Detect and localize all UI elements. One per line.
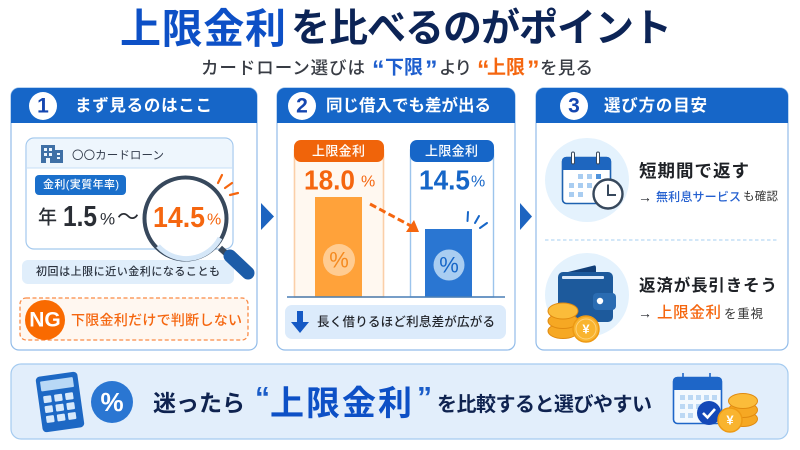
icon: wallet and coins — [545, 253, 629, 342]
title — [120, 6, 672, 52]
column: 14.5% — [410, 140, 494, 297]
arrow: step 2 to 3 — [520, 203, 532, 230]
column: 18.0% — [294, 140, 384, 297]
panel 3 header: 選び方の目安 — [604, 95, 707, 115]
text: short term: 短期間で返す — [639, 161, 749, 181]
banner text: を比較すると選びやすい — [437, 393, 652, 416]
column: 18.0%: 18.0 — [304, 164, 355, 196]
NG box — [20, 298, 248, 340]
icon: calculator — [35, 371, 85, 433]
badge — [35, 175, 126, 195]
subtitle — [201, 56, 593, 84]
subtitle: カードローン選びは — [201, 58, 365, 78]
column: 14.5%: % — [439, 252, 459, 278]
subtitle: ” — [527, 56, 540, 84]
icon: calendar with check and coins — [673, 373, 758, 432]
badge: 金利(実質年率) — [43, 177, 119, 191]
rate text: 年 — [38, 206, 57, 228]
arrow: dashed decrease — [370, 204, 419, 232]
subtitle: “ — [477, 56, 490, 84]
banner text — [153, 382, 652, 423]
column: 18.0%: 上限金利 — [312, 144, 365, 158]
banner text: 迷ったら — [153, 390, 245, 416]
panel: step 1 — [11, 88, 257, 350]
icon: building — [41, 145, 63, 163]
note: interest gap — [285, 305, 506, 339]
column: 18.0%: % — [329, 248, 349, 272]
banner text: “ — [255, 382, 270, 414]
subtitle: より — [439, 58, 472, 78]
column: 14.5%: % — [471, 174, 485, 190]
panel 3 header — [536, 88, 788, 123]
panel 1 header — [11, 88, 257, 123]
panel 3 header: 3 — [568, 94, 580, 118]
icon: calendar with check and coins: ¥ — [726, 412, 734, 428]
icon: magnifier: 14.5 — [153, 202, 205, 234]
text: long repayment — [638, 275, 777, 322]
text: short term — [638, 161, 778, 205]
banner: conclusion — [11, 364, 788, 439]
note bar — [22, 260, 234, 284]
text: long repayment: 上限金利 — [657, 304, 721, 322]
panel: step 3 — [536, 88, 788, 350]
note bar: 初回は上限に近い金利になることも — [36, 264, 220, 278]
title: を比べるのがポイント — [291, 8, 672, 50]
subtitle: 上限 — [487, 56, 525, 78]
subtitle: “ — [372, 56, 384, 84]
icon: percent — [91, 381, 133, 423]
panel 2 header: 2 — [296, 94, 308, 118]
column: 14.5%: 14.5 — [419, 164, 470, 196]
note: interest gap: 長く借りるほど利息差が広がる — [317, 314, 495, 329]
text: short term: → — [638, 189, 652, 205]
text: long repayment: → — [638, 305, 652, 321]
subtitle: 下限 — [385, 56, 423, 78]
NG box: NG — [29, 308, 61, 332]
arrow: step 1 to 2 — [261, 203, 274, 230]
subtitle: を見る — [540, 58, 593, 78]
panel 1 header: 1 — [37, 94, 49, 118]
text: long repayment: を重視 — [724, 306, 763, 321]
icon: calendar and clock — [545, 138, 629, 222]
rate card — [26, 138, 233, 249]
icon: wallet and coins: ¥ — [582, 322, 590, 336]
NG box: 下限金利だけで判断しない — [71, 312, 242, 328]
subtitle: ” — [425, 56, 438, 84]
title: 上限金利 — [120, 6, 286, 52]
banner text: ” — [417, 382, 432, 414]
icon: percent: % — [100, 387, 124, 417]
text: short term: も確認 — [743, 189, 778, 203]
panel 2 header — [277, 88, 515, 123]
column: 14.5%: 上限金利 — [425, 144, 478, 158]
panel 1 header: まず見るのはここ — [75, 96, 212, 115]
text: long repayment: 返済が長引きそう — [639, 275, 777, 295]
icon: magnifier: % — [207, 212, 221, 228]
coins — [548, 303, 578, 338]
rate text: ～ — [117, 204, 139, 230]
text: short term: 無利息サービス — [656, 189, 741, 204]
column: 18.0%: % — [361, 174, 375, 190]
panel: step 2 — [277, 88, 515, 350]
rate text — [38, 201, 139, 233]
rate text: % — [100, 210, 115, 228]
panel 2 header: 同じ借入でも差が出る — [326, 95, 491, 115]
rate text: 1.5 — [63, 201, 97, 233]
icon: magnifier — [144, 175, 248, 273]
rate card: 〇〇カードローン — [72, 149, 164, 162]
banner text: 上限金利 — [270, 385, 412, 423]
chart: interest comparison — [287, 140, 505, 297]
